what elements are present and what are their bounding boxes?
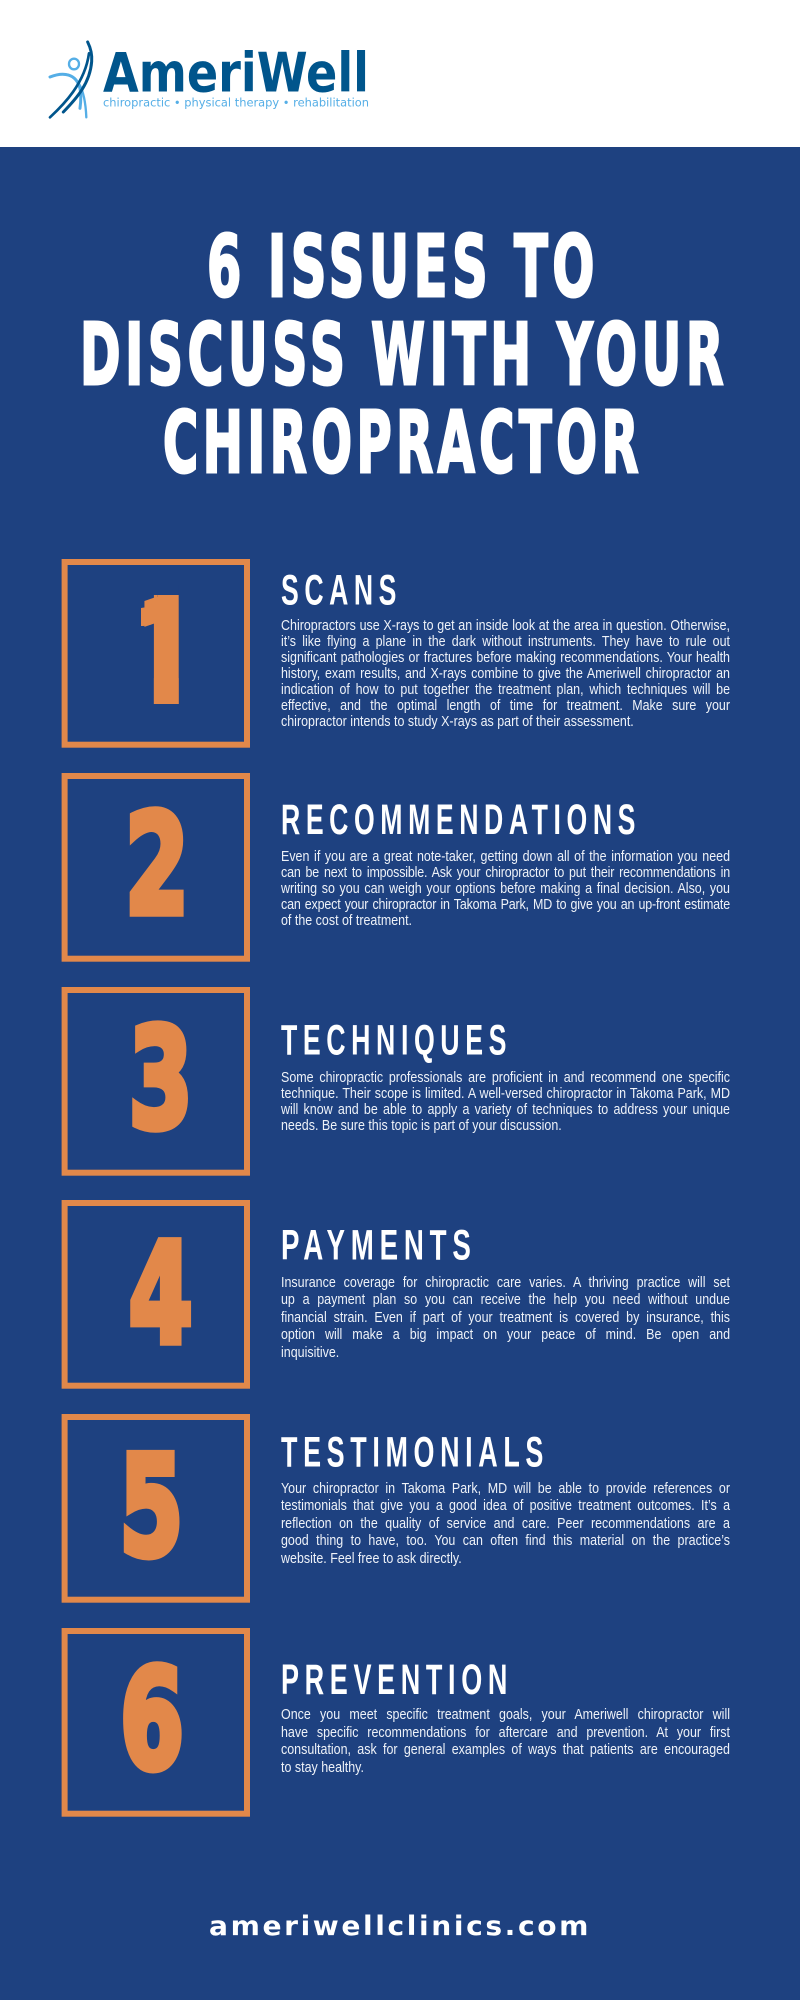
text: techniques bbox=[281, 1070, 730, 1134]
number box 5 bbox=[65, 1417, 247, 1600]
text: payments: up a payment plan so you can receive the help you need without undue bbox=[281, 1292, 730, 1308]
panel: prevention bbox=[62, 1628, 730, 1817]
text: techniques: needs. Be sure this topic is part of your discussion. bbox=[281, 1118, 562, 1134]
heading: testimonials: TESTIMONIALS bbox=[281, 1429, 549, 1477]
number box 6 bbox=[65, 1631, 247, 1814]
text: payments: Insurance coverage for chiropractic care varies. A thriving practice will set bbox=[281, 1275, 730, 1291]
text: recommendations: Even if you are a great note-taker, getting down all of the information you need bbox=[281, 849, 730, 865]
text: testimonials: good thing to have, too. You can often find this material on the practice’s bbox=[281, 1533, 730, 1549]
footer url: ameriwellclinics.com bbox=[209, 1911, 591, 1942]
number box 5: 5 bbox=[119, 1426, 183, 1587]
text: recommendations: can be next to impossible. Ask your chiropractor to put their recommendations in bbox=[281, 865, 730, 881]
title bbox=[80, 218, 728, 493]
text: scans: chiropractor intends to study X-rays as part of their assessment. bbox=[281, 714, 634, 730]
panel: scans bbox=[62, 559, 730, 748]
heading: techniques: TECHNIQUES bbox=[281, 1016, 512, 1064]
text: recommendations bbox=[281, 849, 730, 929]
heading: scans: SCANS bbox=[281, 566, 402, 614]
number box 2: 2 bbox=[125, 784, 189, 946]
text: scans bbox=[281, 618, 730, 730]
text: payments: inquisitive. bbox=[281, 1345, 339, 1361]
text: recommendations: can expect your chiropractor in Takoma Park, MD to give you an up-front estimate bbox=[281, 897, 730, 913]
text: scans: effective, and the optimal length of time for treatment. Make sure your bbox=[281, 698, 730, 714]
text: scans: it’s like flying a plane in the dark without instruments. They have to rule out bbox=[281, 634, 730, 650]
text: payments: option will make a big impact on your peace of mind. Be open and bbox=[281, 1327, 730, 1343]
text: scans: significant pathologies or fractures before making recommendations. Your health bbox=[281, 650, 730, 666]
panel: recommendations bbox=[62, 773, 730, 962]
panel: testimonials bbox=[62, 1414, 730, 1603]
text: prevention: Once you meet specific treatment goals, your Ameriwell chiropractor will bbox=[281, 1707, 730, 1723]
logo tagline: chiropractic • physical therapy • rehabilitation bbox=[103, 96, 369, 110]
text: recommendations: of the cost of treatment. bbox=[281, 913, 412, 929]
number box 4: 4 bbox=[129, 1214, 193, 1375]
text: testimonials: testimonials that give you a good idea of positive treatment outcomes. It’s a bbox=[281, 1498, 730, 1514]
heading: prevention: PREVENTION bbox=[281, 1656, 513, 1704]
number box 6: 6 bbox=[120, 1639, 184, 1800]
icon: logo figure bbox=[50, 42, 92, 117]
number box 3 bbox=[65, 990, 247, 1172]
number box 1 bbox=[65, 562, 247, 745]
text: testimonials: reflection on the quality of service and care. Peer recommendations are a bbox=[281, 1516, 730, 1532]
text: payments: financial strain. Even if part of your treatment is covered by insurance, this bbox=[281, 1310, 730, 1326]
text: techniques: will know and be able to apply a variety of techniques to address your unique bbox=[281, 1102, 730, 1118]
text: prevention: consultation, ask for general examples of ways that patients are encouraged bbox=[281, 1742, 730, 1758]
panel: techniques bbox=[62, 987, 730, 1176]
logo bbox=[48, 40, 369, 119]
text: scans: indication of how to put together the treatment plan, which techniques will be bbox=[281, 682, 730, 698]
text: recommendations: writing so you can weigh your options before making a final decision. Also, you bbox=[281, 881, 730, 897]
number box 2 bbox=[65, 776, 247, 959]
number box 3: 3 bbox=[129, 998, 193, 1159]
text: prevention bbox=[281, 1707, 730, 1776]
text: payments bbox=[281, 1275, 730, 1361]
text: prevention: to stay healthy. bbox=[281, 1760, 364, 1776]
text: scans: history, exam results, and X-rays combine to give the Ameriwell chiropractor an bbox=[281, 666, 730, 682]
number box 4 bbox=[65, 1203, 247, 1386]
header band bbox=[0, 0, 800, 147]
text: prevention: have specific recommendations for aftercare and prevention. At your first bbox=[281, 1725, 730, 1741]
text: testimonials: website. Feel free to ask directly. bbox=[281, 1551, 462, 1567]
text: scans: Chiropractors use X-rays to get an inside look at the area in question. Otherwise, bbox=[281, 618, 730, 634]
number box 1: 1 bbox=[137, 571, 195, 733]
text: techniques: technique. Their scope is limited. A well-versed chiropractor in Takoma Park, MD bbox=[281, 1086, 730, 1102]
heading: payments: PAYMENTS bbox=[281, 1222, 477, 1270]
panel: payments bbox=[62, 1200, 730, 1389]
logo wordmark: AmeriWell bbox=[103, 41, 369, 105]
text: testimonials: Your chiropractor in Takoma Park, MD will be able to provide references or bbox=[281, 1481, 730, 1497]
text: techniques: Some chiropractic professionals are proficient in and recommend one specific bbox=[281, 1070, 730, 1086]
text: testimonials bbox=[281, 1481, 730, 1567]
